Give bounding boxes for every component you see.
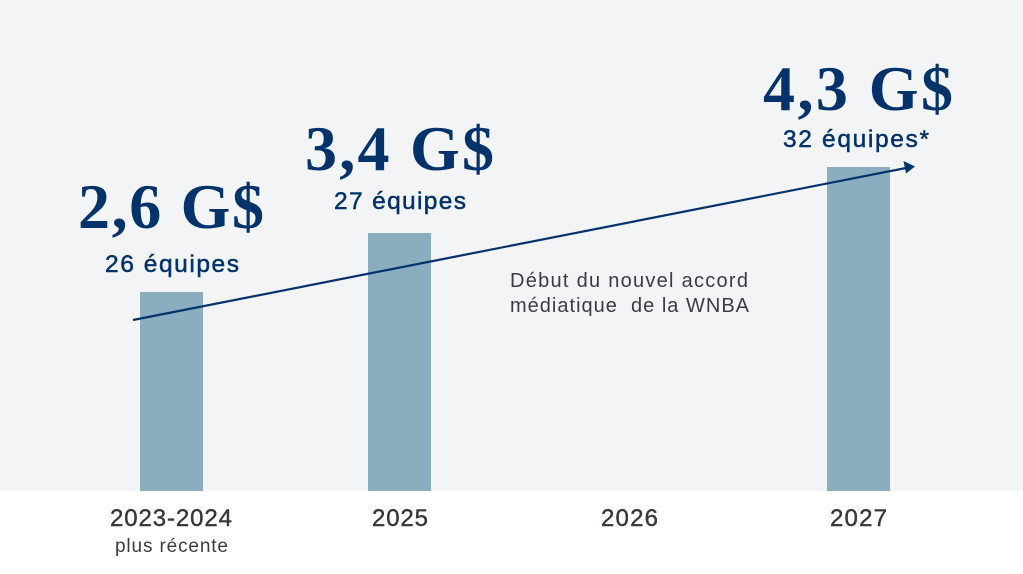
value: 3,4 G$: 3,4 G$	[305, 113, 494, 184]
bar: 2023-2024	[140, 292, 203, 491]
value: 4,3 G$: 4,3 G$	[763, 53, 953, 124]
label: 26 équipes: 26 équipes	[105, 251, 239, 278]
bar: 2027	[827, 167, 890, 491]
annotation: début du nouvel accord: Début du nouvel accord	[510, 270, 748, 292]
annotation: début du nouvel accord: médiatique de la WNBA	[510, 295, 750, 317]
axis label: 2023-2024: 2023-2024	[110, 505, 232, 532]
value: 2,6 G$: 2,6 G$	[78, 171, 264, 242]
axis label: 2026: 2026	[601, 505, 658, 532]
axis label: 2025: 2025	[372, 505, 428, 532]
arrow: growth trend	[133, 161, 915, 320]
label: 27 équipes: 27 équipes	[334, 188, 466, 215]
axis label: 2023-2024: plus récente	[115, 536, 228, 557]
axis label: 2023-2024	[110, 505, 232, 557]
bar: 2025	[368, 233, 431, 491]
label: 32 équipes*: 32 équipes*	[783, 126, 929, 153]
axis label: 2027: 2027	[830, 505, 887, 532]
annotation: début du nouvel accord	[510, 270, 750, 317]
